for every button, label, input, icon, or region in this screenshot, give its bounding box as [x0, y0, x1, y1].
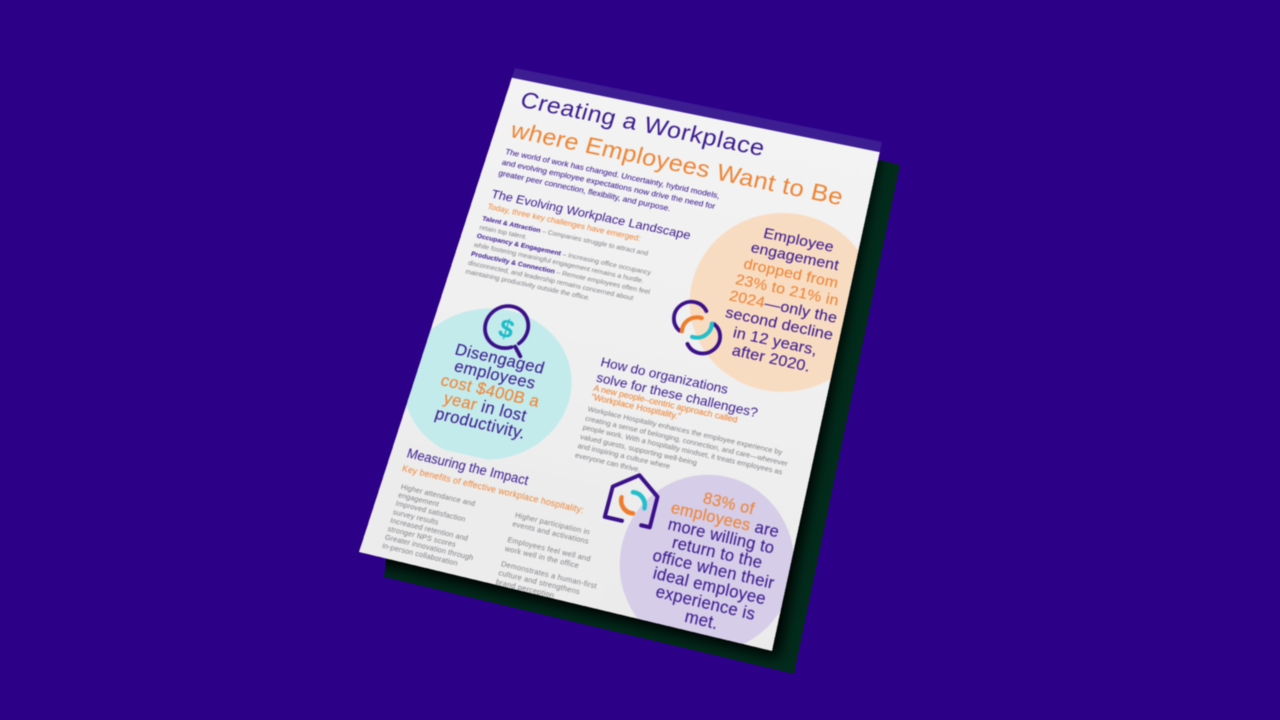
challenges list: maintaining productivity outside the office. — [464, 268, 591, 302]
top band — [512, 68, 882, 152]
icon: house with arcs — [602, 472, 660, 530]
benefits left column — [381, 483, 476, 568]
circle: lilac stat — [600, 458, 811, 671]
peach stat text: engagement — [749, 239, 841, 274]
peach stat text: 2024—only the — [728, 287, 839, 327]
workplace hospitality paragraph: everyone can thrive. — [574, 451, 641, 474]
title: where Employees Want to Be — [508, 116, 846, 210]
lilac stat text: employees are — [669, 498, 781, 541]
teal stat text: employees — [452, 357, 538, 393]
peach stat text: dropped from — [742, 255, 840, 292]
peach stat text — [724, 225, 841, 376]
icon: magnifier with dollar: $ — [470, 296, 484, 319]
challenges list: Productivity & Connection – Remote employees often feel — [470, 250, 651, 296]
intro paragraph: and evolving employee expectations now drive the need for — [501, 158, 716, 211]
lilac stat text: ideal employee — [651, 563, 768, 608]
panel: measuring the impact — [359, 438, 629, 610]
subheading: three key challenges: Today, three key challenges have emerged: — [486, 202, 642, 243]
lilac stat text: office when their — [651, 545, 776, 593]
teal stat text: cost $400B a — [438, 371, 542, 411]
peach stat text: Employee — [762, 225, 835, 256]
subheading: key benefits: Key benefits of effective workplace hospitality: — [401, 463, 585, 515]
circle: peach stat — [670, 197, 892, 410]
challenges list: Talent & Attraction – Companies struggle to attract and — [481, 215, 649, 257]
teal stat text — [433, 340, 547, 443]
teal stat text: productivity. — [433, 404, 528, 443]
workplace hospitality paragraph: creating a sense of belonging, connection, and care—wherever — [584, 414, 789, 468]
title: Creating a Workplace — [517, 86, 768, 161]
challenges list: Occupancy & Engagement – Increasing office occupancy — [476, 232, 652, 277]
challenges list: retain top talent. — [478, 223, 528, 241]
heading: the evolving workplace landscape: The Evolving Workplace Landscape — [490, 187, 692, 242]
benefits left column: survey results — [392, 508, 440, 527]
benefits left column: Increased retention and — [389, 516, 469, 543]
heading: measuring the impact: Measuring the Impact — [405, 446, 530, 488]
benefits left column: engagement — [397, 491, 440, 509]
subheading: workplace hospitality: “Workplace Hospitality.” — [590, 391, 682, 421]
backing sheet and shadow — [384, 160, 900, 674]
teal stat text: Disengaged — [453, 340, 547, 378]
benefits left column: Higher attendance and — [400, 483, 476, 508]
workplace hospitality paragraph: people work. With a hospitality mindset, it treats employees as — [582, 423, 783, 477]
workplace hospitality paragraph: valued guests, supporting well-being — [579, 432, 698, 467]
challenges list — [464, 215, 652, 302]
peach stat text: in 12 years, — [731, 323, 819, 359]
circle: teal stat — [383, 293, 589, 477]
challenges list: disconnected, and leadership remains concerned about — [467, 259, 634, 302]
icon: magnifier with dollar — [470, 296, 531, 360]
benefit: human-first culture: brand perception — [495, 578, 555, 600]
heading: how do organizations: How do organizations — [599, 354, 730, 397]
lilac stat text: 83% of — [701, 488, 756, 518]
subheading: workplace hospitality: A new people–centric approach called — [592, 383, 739, 425]
heading: how do organizations: solve for these challenges? — [595, 370, 759, 421]
benefits left column: stronger NPS scores — [386, 524, 457, 549]
benefit: human-first culture: culture and strengthens — [497, 568, 581, 596]
icon: linked rings — [671, 299, 723, 356]
lilac stat text: more willing to — [666, 514, 776, 557]
benefits left column: Improved satisfaction — [394, 499, 467, 524]
panel: infographic sheet — [359, 68, 882, 651]
benefit: well-being: Employees feel well and — [506, 535, 592, 563]
benefits left column: in-person collaboration — [381, 542, 459, 568]
intro paragraph: greater peer connection, flexibility, and purpose. — [497, 168, 672, 213]
benefit: participation: Higher participation in — [514, 511, 591, 537]
peach stat text: 23% to 21% in — [734, 271, 840, 309]
intro paragraph: The world of work has changed. Uncertainty, hybrid models, — [504, 147, 721, 200]
benefits left column: Greater innovation through — [384, 533, 475, 562]
workplace hospitality paragraph: Workplace Hospitality enhances the employee experience by — [587, 405, 783, 457]
benefit: human-first culture: Demonstrates a human-first — [500, 559, 598, 591]
peach stat text: after 2020. — [730, 341, 812, 376]
workplace hospitality paragraph: and inspiring a culture where — [577, 442, 671, 471]
lilac stat text — [651, 488, 781, 633]
peach stat text: second decline — [724, 304, 835, 344]
lilac stat text: experience is — [654, 581, 757, 624]
benefit: participation: events and activations — [511, 520, 590, 546]
challenges list: while fostering meaningful engagement remains a hurdle. — [473, 241, 645, 285]
teal stat text: year in lost — [441, 389, 529, 426]
lilac stat text: return to the — [670, 533, 764, 572]
benefit: well-being: work well in the office — [504, 544, 580, 570]
lilac stat text: met. — [683, 606, 720, 633]
